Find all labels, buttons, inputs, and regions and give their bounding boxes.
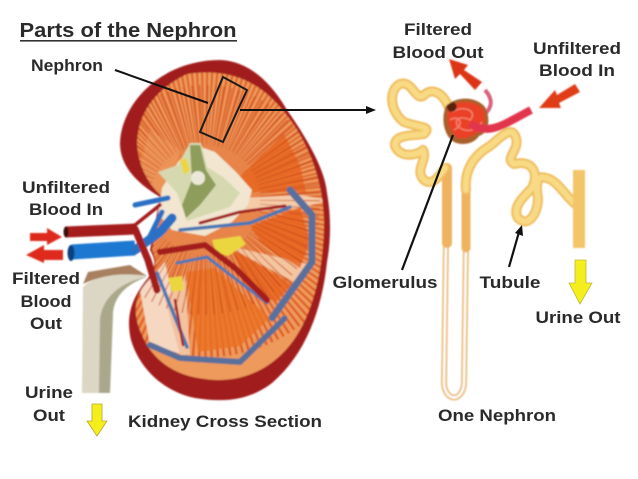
renal vein branches [72, 190, 312, 362]
label: urine out (kidney): Out [33, 407, 66, 425]
label: filtered blood out (kidney): Blood [20, 293, 72, 311]
nephron box marker [200, 77, 247, 142]
label: filtered blood out (nephron): Blood Out [392, 44, 484, 62]
efferent arteriole [484, 90, 491, 115]
pale gaps between pyramids [243, 194, 324, 212]
distal convoluted tubule [466, 132, 578, 221]
glomerulus [443, 99, 488, 144]
yellow fat patches [180, 158, 190, 175]
ureter [82, 274, 147, 393]
label: unfiltered blood in (kidney): Blood In [29, 201, 103, 219]
label: tubule: Tubule [480, 274, 540, 292]
kidney outer capsule [120, 60, 330, 400]
renal artery branches [66, 205, 285, 345]
label: kidney cross section: Kidney Cross Section [128, 413, 322, 431]
yellow arrow: urine out (nephron) [569, 260, 592, 304]
red arrow: unfiltered blood in [30, 228, 62, 245]
afferent arteriole [470, 110, 531, 129]
yellow arrow: urine out (kidney) [87, 404, 107, 436]
thick descending limb [442, 168, 452, 243]
label: unfiltered blood in (kidney): Unfiltered [22, 179, 110, 197]
cortex fine streaks [110, 105, 330, 355]
collecting duct [573, 170, 585, 248]
kidney cross section illustration [64, 60, 330, 400]
label: filtered blood out (kidney): Filtered [12, 270, 80, 288]
thick ascending limb [462, 190, 470, 248]
label: nephron: Nephron [31, 57, 103, 75]
red arrow: filtered blood out (nephron) [449, 59, 482, 90]
medullary pyramid: bottom [186, 268, 270, 352]
streak overlay [120, 115, 290, 285]
glomerulus pointer line [402, 135, 453, 270]
medullary pyramid: upper right [240, 134, 306, 192]
nephron illustration [392, 83, 579, 398]
proximal convoluted tubule [392, 83, 449, 182]
label: urine out (nephron): Urine Out [536, 309, 621, 327]
label: filtered blood out (kidney) [12, 270, 80, 333]
tubule pointer [509, 225, 523, 267]
label: glomerulus: Glomerulus [332, 274, 438, 292]
label: filtered blood out (kidney): Out [30, 315, 63, 333]
label: urine out (kidney): Urine [25, 384, 73, 402]
label: urine out (kidney) [25, 384, 73, 425]
kidney cortex [136, 73, 324, 380]
label: unfiltered blood in (nephron) [533, 40, 621, 80]
label: unfiltered blood in (kidney) [22, 179, 110, 219]
descending and ascending thin loop [444, 240, 466, 398]
label: unfiltered blood in (nephron): Blood In [539, 62, 615, 80]
renal pelvis [158, 143, 240, 221]
medullary pyramid: lower right [232, 248, 292, 302]
title: Parts of the Nephron [20, 20, 237, 42]
medullary pyramid: right [250, 208, 310, 268]
red arrow: filtered blood out [26, 245, 63, 263]
label: unfiltered blood in (nephron): Unfiltered [533, 40, 621, 58]
label: filtered blood out (nephron) [392, 21, 484, 62]
label: filtered blood out (nephron): Filtered [404, 21, 472, 39]
pale renal sinus [158, 145, 252, 236]
arrow: kidney to nephron [240, 106, 376, 114]
label: one nephron: One Nephron [438, 407, 556, 425]
nephron pointer line [115, 70, 208, 103]
red arrow: unfiltered blood in (nephron) [539, 84, 580, 108]
